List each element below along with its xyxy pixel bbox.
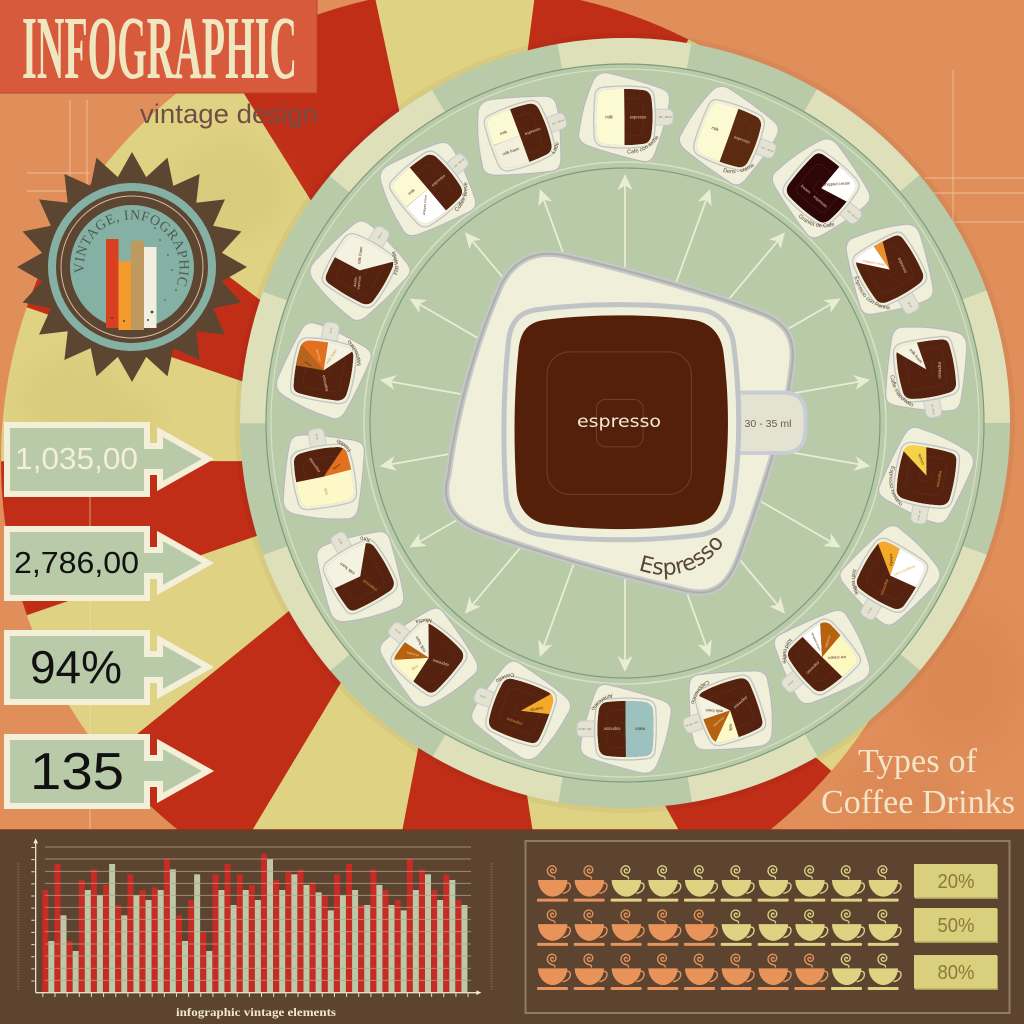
wheel: drink ring (148, 0, 1024, 900)
cup rows (537, 866, 901, 990)
arrow to Irish coffee (708, 467, 844, 554)
cup: Coffee Breve: 150 - 160 ml (454, 158, 465, 169)
cup: Latte: Latte (551, 142, 559, 154)
row: 20 percent (537, 866, 901, 902)
cup: Irish coffee: whisky (889, 554, 894, 567)
cup: Iced coffee: Iced coffee (782, 638, 792, 664)
cup: Granita de Cafe: frozen espresso (800, 183, 829, 209)
row: 80 percent (537, 954, 901, 990)
arrow to Toro (406, 467, 542, 554)
cup: Freddo (282, 428, 366, 520)
cup: Irish coffee (839, 524, 941, 626)
red series (42, 854, 461, 993)
cup: Latte: milk foam (502, 146, 520, 157)
cup: Demi-creme: milk (711, 125, 720, 132)
cup: Granita de Cafe: whipped cream (822, 180, 851, 187)
cup: Latte: espresso (524, 126, 542, 136)
cup: Cappuccino: chocolate (712, 716, 725, 728)
cup: Coffee Breve: espresso (430, 173, 447, 187)
cup: Irish coffee: whipped cream (893, 564, 916, 577)
cup: Cappuccino: espresso (732, 695, 749, 711)
cup: Flat White: double (353, 277, 358, 288)
stat value: 1,035,00 (15, 441, 138, 476)
cup: Coffee Breve: milk (407, 187, 416, 196)
arrow to Granita de Cafe (684, 227, 791, 351)
cup: Caffe macchiato: Caffe macchiato (890, 375, 914, 406)
label 50%: 50% (938, 915, 975, 937)
label 80%: 80% (938, 962, 975, 984)
cup: Corretto: espresso (505, 716, 523, 727)
stat arrow 4 (7, 737, 208, 806)
cup: Coffee Breve: whipped cream (422, 194, 428, 215)
cup: Mocha: 150 ml (395, 628, 402, 634)
cup: Espresso romano: espresso (936, 470, 943, 488)
cup: Demi-creme (678, 86, 780, 186)
cup: Mocha: Mocha (415, 618, 432, 624)
cup name: Espresso (640, 538, 722, 580)
cup: Cafe con leche: 150 - 160 ml (659, 117, 672, 119)
cup: Espresso con Panna: espresso (897, 257, 909, 274)
arrow to Iced coffee (684, 495, 791, 619)
stains on paper (840, 610, 1020, 820)
cup: Coffee Breve: Coffee Breve (455, 182, 468, 212)
cup: Flat White: espresso (356, 275, 362, 290)
text: INFOGRAPHIC (22, 0, 297, 98)
arrow to Freddo (378, 433, 528, 474)
cup: Espresso romano: 30 - 35 ml (916, 510, 920, 521)
heading: Types of Coffee Drinks: Types of (858, 743, 978, 780)
arrow to Demi-creme (652, 186, 717, 332)
cup: Americano (576, 683, 672, 774)
chart axes (33, 838, 481, 995)
stat value: 94% (30, 641, 122, 693)
arrow to Mocha (459, 495, 566, 619)
subtitle: vintage design (140, 99, 318, 129)
cup: Espresso con Panna: Espresso con Panna (854, 276, 890, 310)
cup: Caffe macchiato (884, 326, 968, 418)
label 80% (914, 955, 998, 990)
cup: Latte: 150 - 160 ml (552, 119, 565, 126)
cup: Irish coffee: Irish coffee (852, 569, 858, 595)
cup: Demi-creme: espresso (733, 134, 751, 145)
cup: Marocchino: cocoa (303, 360, 313, 368)
cup: Corretto (470, 660, 572, 760)
cup: Iced coffee: 120 ml (787, 679, 794, 686)
arrow to Flat White (406, 292, 542, 379)
cup: Corretto: 60 ml (480, 694, 486, 698)
heading: Types of Coffee Drinks (821, 743, 1015, 821)
cup: Freddo: espresso (307, 456, 321, 474)
cup: Demi-creme: 150 - 160 ml (761, 147, 774, 153)
volume label: 30 - 35 ml (744, 419, 792, 430)
cup: Americano: Americano (592, 694, 612, 710)
cup: Toro: 60 ml (338, 538, 343, 544)
cup: Toro: milk foam (338, 561, 356, 576)
cup: Cappuccino: Cappuccino (691, 680, 710, 704)
arrow to Caffe macchiato (722, 372, 872, 413)
cup: Mocha: milk (410, 664, 419, 672)
cup: Espresso romano: Espresso romano (888, 466, 902, 506)
cup: Freddo: milk (323, 487, 329, 496)
cup: Espresso romano (878, 426, 974, 524)
label 20% (914, 864, 998, 899)
badge star (17, 152, 247, 382)
cup: Flat White: milk foam (356, 246, 364, 264)
cup: Iced coffee (773, 609, 871, 705)
cup: Mocha (379, 607, 479, 708)
cup: Caffe macchiato: 30 - 35 ml (930, 404, 934, 415)
stat arrow 2 (7, 529, 208, 598)
cup: Flat White (309, 220, 411, 322)
cup: Americano: water (634, 726, 645, 732)
cup: Americano: espresso (603, 726, 620, 732)
badge (17, 152, 247, 382)
cup: Cappuccino: milk (728, 724, 734, 732)
cup: Marocchino: milk foam (324, 347, 338, 365)
cup: Cappuccino: 150 - 160 ml (685, 720, 698, 727)
faint grid strokes on paper (27, 70, 1024, 240)
heading: Types of Coffee Drinks: Coffee Drinks (821, 784, 1015, 821)
cup: Granita de Cafe: Granita de Cafe (799, 214, 834, 228)
bottom band (0, 830, 1024, 1024)
green series (48, 859, 467, 993)
cup: Iced coffee: espresso (805, 660, 821, 676)
cup: Iced coffee: ice cream (828, 655, 846, 661)
arrow to Espresso con Panna (708, 292, 844, 379)
cup: Freddo: liqueur (332, 462, 342, 471)
bar chart (18, 838, 492, 995)
cup: Caffe macchiato: espresso (938, 362, 943, 379)
cup: Marocchino: chocolate (314, 348, 322, 362)
cup: Irish coffee: 120 ml (866, 607, 872, 614)
cup: Iced coffee: whipped cream (810, 632, 822, 652)
cup: Marocchino (276, 322, 372, 420)
cup: Latte: milk (499, 129, 509, 136)
cup: Espresso con Panna: whipped cream (862, 259, 886, 267)
cup: Freddo: Freddo (336, 440, 352, 452)
radial arrows (378, 174, 872, 672)
cup: Coffee Breve (379, 142, 477, 237)
arrow to Corretto (533, 514, 598, 660)
arrow to Cappuccino (652, 514, 717, 660)
cup: Cafe con leche: espresso (630, 114, 647, 120)
cup: Cafe con leche: Cafe con leche (627, 136, 658, 154)
cup: Corretto: brandy (529, 706, 543, 713)
cup: Caffe macchiato: milk foam (908, 347, 924, 364)
cup: Latte (476, 95, 568, 176)
cup: Cappuccino (682, 670, 774, 751)
cup: Demi-creme: Demi - creme (723, 164, 754, 174)
arrow to Cafe con leche (618, 174, 632, 323)
cup: Granita de Cafe (771, 138, 871, 239)
label 20%: 20% (938, 871, 975, 893)
cup: Espresso con Panna (845, 223, 934, 316)
row: 50 percent (537, 910, 901, 946)
cup: Marocchino: espresso (321, 374, 329, 392)
cup: Flat White: 200 ml (378, 232, 384, 239)
ray texture stains (20, 140, 290, 450)
cup: Cafe con leche (578, 72, 674, 163)
stat value: 135 (30, 743, 124, 801)
cup percentage panel (526, 841, 1010, 1013)
cup: Iced coffee: chocolate (824, 635, 832, 649)
arrow to Americano (618, 523, 632, 672)
arrow to Latte (533, 186, 598, 332)
cup: Cappuccino: milk foam (705, 708, 723, 714)
cup: Espresso con Panna: 60 ml (907, 302, 912, 308)
cup: Flat White: Flat White (392, 251, 398, 275)
cup: Granita de Cafe: 100 - 150 ml (846, 210, 858, 220)
cup: Cafe con leche: milk (605, 114, 614, 120)
central espresso cup (442, 250, 808, 596)
cup: Toro: Toro (360, 536, 370, 542)
cup: Americano: 100 - 150 ml (578, 727, 591, 729)
arrow to Espresso romano (722, 433, 872, 474)
cup: Toro: espresso (361, 578, 378, 593)
stat arrow 3 (7, 633, 208, 702)
espresso label: espresso (577, 412, 661, 432)
cup: Marocchino: 60 ml (330, 327, 333, 334)
stat value: 2,786,00 (14, 545, 139, 580)
badge mini bar chart (106, 239, 156, 330)
cup: Irish coffee: espresso (879, 579, 890, 597)
cup: Freddo: 60 ml (316, 433, 319, 440)
cup: Marocchino: Marocchino (348, 340, 361, 366)
stat arrow 1 (7, 425, 208, 494)
cup: Mocha: milk foam (414, 635, 427, 653)
cup: Mocha: chocolate (406, 650, 419, 658)
chart caption: infographic vintage elements (176, 1005, 336, 1019)
cup: Mocha: espresso (431, 658, 449, 668)
title banner (0, 0, 317, 98)
arrow to Marocchino (378, 372, 528, 413)
cup: Toro (316, 530, 405, 623)
label 50% (914, 908, 998, 943)
cup: Espresso romano: lemon (917, 453, 926, 466)
cup: Corretto: Corretto (496, 673, 514, 682)
arrow to Coffee Breve (459, 227, 566, 351)
